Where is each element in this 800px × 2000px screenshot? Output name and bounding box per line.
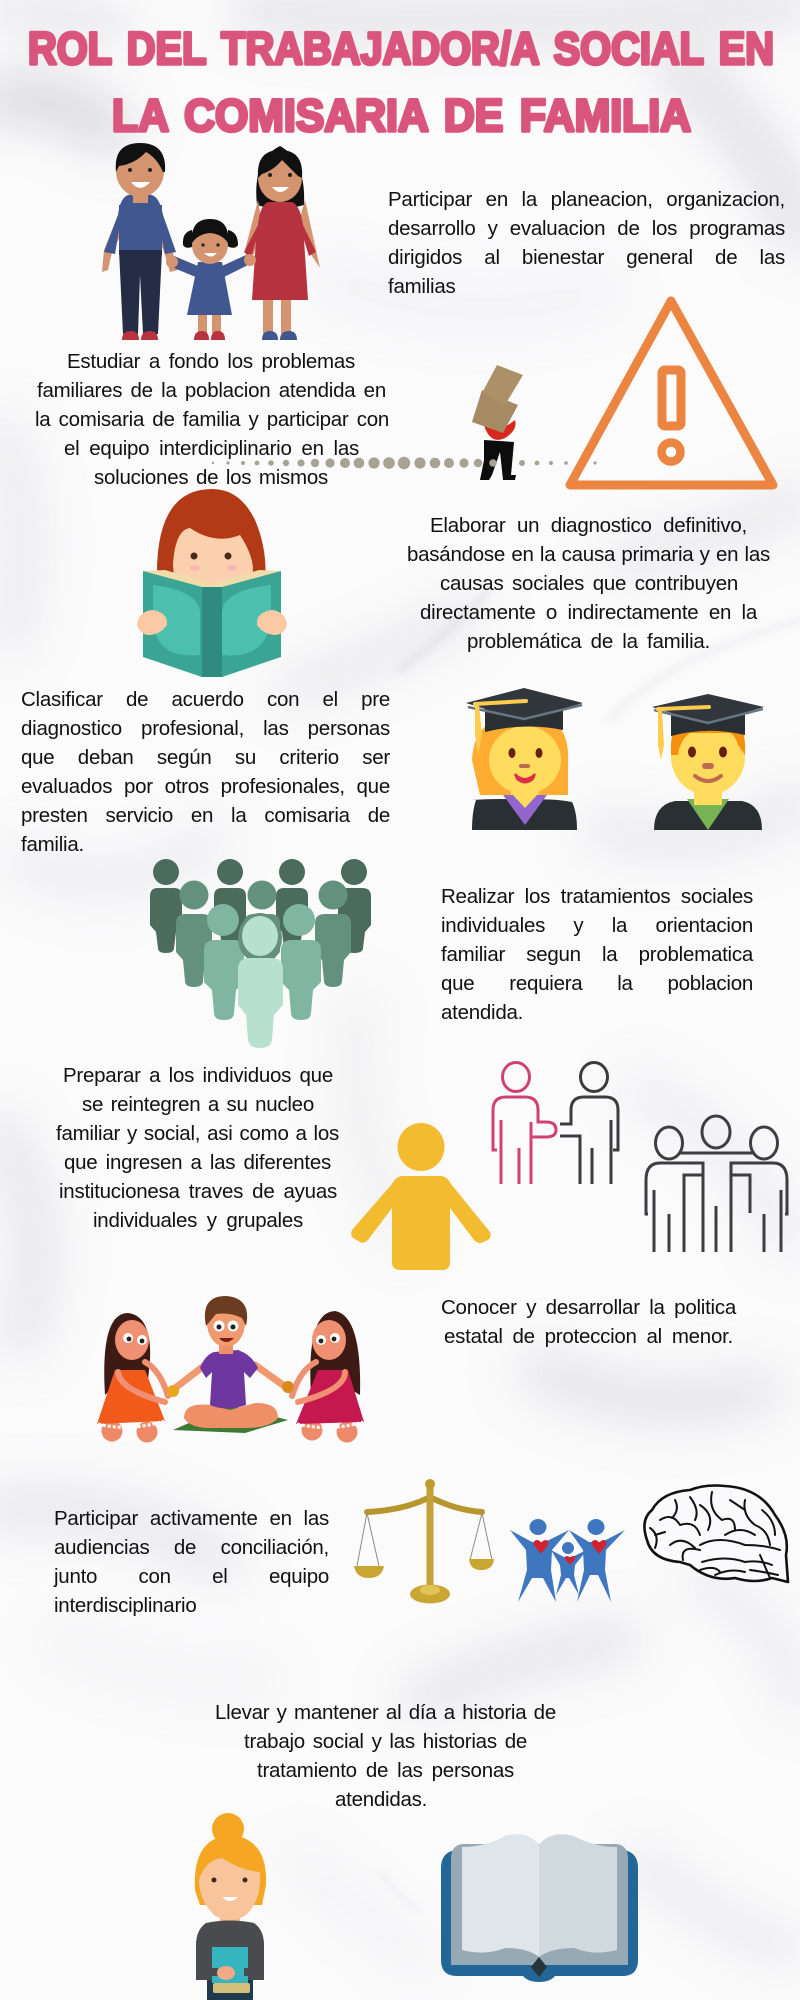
icon: graduate man [652,694,764,830]
text: elaborar diagnostico [407,514,770,653]
text: elaborar diagnostico: causas sociales que contribuyen [440,572,738,595]
text: elaborar diagnostico: basándose en la causa primaria y en las [407,543,770,566]
text: llevar historia: trabajo social y las historias de [244,1730,527,1753]
text: llevar historia: Llevar y mantener al día a historia de [215,1701,556,1724]
text: elaborar diagnostico: problemática de la familia. [467,630,710,653]
text: clasificar: evaluados por otros profesionales, que [21,775,390,798]
icon: warning triangle [570,301,773,485]
text: estudiar problemas: la comisaria de familia y participar con [35,408,389,431]
icon: children with bracelets [97,1296,364,1442]
text: preparar individuos [56,1064,339,1232]
text: clasificar [21,688,390,856]
icon: crowd of people [150,859,371,1048]
text: estudiar problemas: el equipo interdiciplinario en las [64,437,359,460]
text: estudiar problemas: soluciones de los mismos [94,466,328,489]
text: conocer politica: estatal de proteccion al menor. [444,1325,733,1348]
text: realizar tratamientos: atendida. [441,1001,523,1024]
text: llevar historia: atendidas. [335,1788,427,1811]
icon: girl reading book [137,489,287,677]
text: llevar historia [215,1701,556,1811]
text: realizar tratamientos [441,885,754,1024]
text: elaborar diagnostico: Elaborar un diagnostico definitivo, [430,514,747,537]
text: preparar individuos: que ingresen a las diferentes [64,1151,331,1174]
text: estudiar problemas: familiares de la poblacion atendida en [37,379,386,402]
text: participar planeacion: Participar en la planeacion, organizacion, [388,188,785,211]
icon: open book [441,1834,638,1982]
text: participar audiencias [54,1507,329,1617]
text: conocer politica: Conocer y desarrollar la politica [441,1296,736,1319]
text: clasificar: que deban según su criterio ser [21,746,390,769]
text: llevar historia: tratamiento de las personas [257,1759,514,1782]
icon: graduate woman [466,688,583,830]
text: estudiar problemas [35,350,389,489]
text: clasificar: Clasificar de acuerdo con el pre [21,688,390,711]
text: preparar individuos: institucionesa traves de ayuas [59,1180,337,1203]
text: elaborar diagnostico: directamente o indirectamente en la [420,601,757,624]
icon: scales of justice [354,1479,494,1604]
text: participar planeacion: desarrollo y evaluacion de los programas [388,217,785,240]
text: clasificar: presten servicio en la comisaria de [21,804,390,827]
text: realizar tratamientos: individuales y la orientacion [441,914,753,937]
text: participar planeacion: dirigidos al bienestar general de las [388,246,785,269]
text: preparar individuos: se reintegren a su nucleo [82,1093,314,1116]
icon: person carrying boxes [472,365,523,480]
text: conocer politica [441,1296,736,1348]
text: clasificar: diagnostico profesional, las personas [21,717,390,740]
text: participar audiencias: audiencias de conciliación, [54,1536,329,1559]
icon: brain [644,1486,788,1582]
text: realizar tratamientos: Realizar los tratamientos sociales [441,885,753,908]
text: participar audiencias: junto con el equipo [54,1565,329,1588]
icon: blue family with hearts [510,1519,625,1602]
text: realizar tratamientos: que requiera la poblacion [441,972,753,995]
title [28,23,774,141]
text: participar audiencias: interdisciplinario [54,1594,196,1617]
text: clasificar: familia. [21,833,84,856]
icon: two people outline [493,1062,618,1184]
text: preparar individuos: familiar y social, asi como a los [56,1122,339,1145]
icon: woman holding book [195,1813,266,2000]
icon: yellow person [351,1123,491,1270]
text: realizar tratamientos: familiar segun la problematica [441,943,753,966]
text: preparar individuos: individuales y grupales [93,1209,303,1232]
text: participar planeacion [388,188,785,298]
text: estudiar problemas: Estudiar a fondo los problemas [67,350,355,373]
title: LA COMISARIA DE FAMILIA [112,90,691,141]
dotted line [212,457,597,469]
text: participar planeacion: familias [388,275,456,298]
icon: three people outline [646,1116,787,1252]
text: participar audiencias: Participar activamente en las [54,1507,329,1530]
icon: family [102,143,320,340]
text: preparar individuos: Preparar a los individuos que [63,1064,333,1087]
